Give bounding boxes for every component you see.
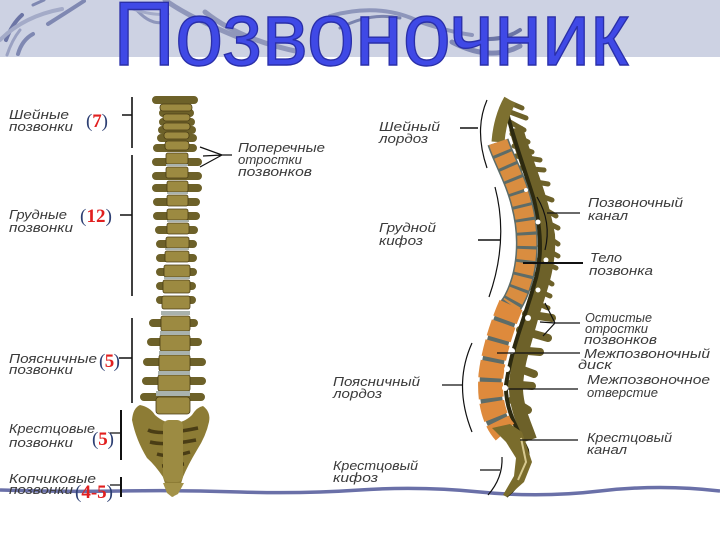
labels curves: лордоз xyxy=(332,387,382,401)
vertebra counts xyxy=(75,111,120,503)
labels curves: Поясничный xyxy=(333,375,420,389)
vertebra counts: (5) xyxy=(92,429,114,450)
labels structures right: Тело xyxy=(590,251,622,265)
labels structures right: отростки xyxy=(585,322,648,336)
labels structures right: канал xyxy=(587,443,627,457)
labels structures right: Крестцовый xyxy=(587,431,672,445)
labels left: Шейные xyxy=(9,108,69,122)
header band with brush strokes xyxy=(0,0,720,57)
labels curves: кифоз xyxy=(333,471,378,485)
labels left: позвонки xyxy=(9,363,73,377)
labels structures right: диск xyxy=(578,358,613,372)
labels left: позвонки xyxy=(9,436,73,450)
transverse processes xyxy=(144,100,202,397)
labels structures right: позвонка xyxy=(589,264,653,278)
labels left: Крестцовые xyxy=(9,422,95,436)
labels structures right: Позвоночный xyxy=(588,196,683,210)
labels structures right xyxy=(578,196,710,457)
label: transverse processes: Поперечные xyxy=(238,141,325,155)
spinal canal xyxy=(506,112,540,496)
labels structures right: Межпозвоночное xyxy=(587,373,710,387)
labels structures right: Межпозвоночный xyxy=(584,347,710,361)
thoracic bodies xyxy=(498,142,527,305)
label: transverse processes: позвонков xyxy=(238,165,313,179)
labels curves: Грудной xyxy=(379,221,436,235)
sacrum xyxy=(132,405,209,497)
labels curves: Шейный xyxy=(379,120,440,134)
vertebra counts: (12) xyxy=(80,206,112,227)
horizontal blue line xyxy=(0,488,720,495)
annotation arcs and lines right xyxy=(442,100,583,495)
annotation lines left xyxy=(110,97,132,497)
labels left: позвонки xyxy=(9,221,73,235)
labels curves xyxy=(332,120,440,485)
intervertebral foramina xyxy=(502,188,548,391)
label: transverse processes xyxy=(238,141,325,179)
labels structures right: позвонков xyxy=(584,333,658,347)
label: transverse processes: отростки xyxy=(238,153,302,167)
transverse process pointers xyxy=(200,147,232,167)
labels left: позвонки xyxy=(9,120,73,134)
labels left xyxy=(9,108,97,497)
labels structures right: отверстие xyxy=(587,386,658,400)
labels structures right: канал xyxy=(588,209,628,223)
labels curves: Крестцовый xyxy=(333,459,418,473)
spine side view xyxy=(491,100,558,497)
vertebra counts: (4-5) xyxy=(75,482,113,503)
lumbar bodies xyxy=(491,305,511,432)
spinous processes xyxy=(508,102,558,410)
posterior arches xyxy=(516,128,548,440)
labels curves: кифоз xyxy=(379,234,423,248)
sacrum and coccyx xyxy=(492,424,532,497)
intervertebral discs xyxy=(156,164,190,396)
cervical bodies xyxy=(498,100,510,142)
vertebral bodies xyxy=(156,104,192,414)
labels left: Грудные xyxy=(9,208,67,222)
spine front view xyxy=(132,100,209,497)
vertebra counts: (7) xyxy=(86,111,108,132)
labels left: позвонки xyxy=(9,483,73,497)
labels curves: лордоз xyxy=(378,132,428,146)
vertebra counts: (5) xyxy=(99,351,120,372)
coccyx xyxy=(163,483,184,497)
labels left: Поясничные xyxy=(9,352,97,366)
body column discs xyxy=(491,142,527,432)
labels left: Копчиковые xyxy=(9,472,96,486)
labels structures right: Остистые xyxy=(585,311,652,325)
